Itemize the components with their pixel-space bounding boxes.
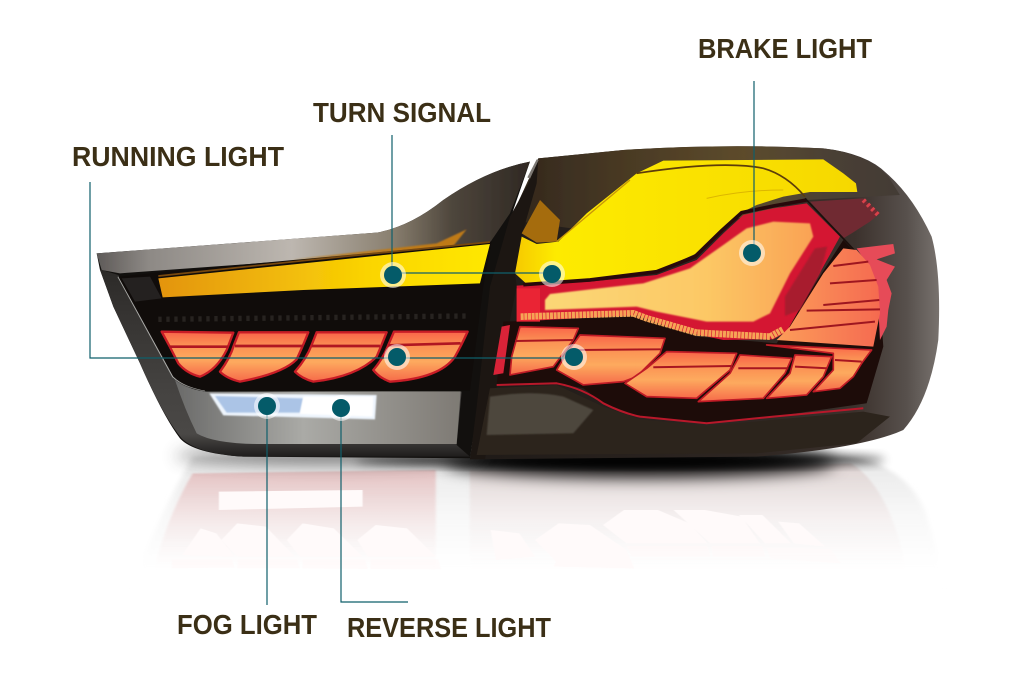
label: brake light: BRAKE LIGHT xyxy=(698,33,872,64)
marker: reverse light xyxy=(328,395,354,421)
left trunk lamp xyxy=(97,162,530,458)
label: running light: RUNNING LIGHT xyxy=(72,141,284,172)
yellow turn signal area xyxy=(515,159,857,284)
running light fins xyxy=(493,244,895,423)
marker: running light, trunk lamp xyxy=(384,344,410,370)
marker: turn signal, trunk lamp xyxy=(380,262,406,288)
outer left edge xyxy=(100,269,470,457)
fin recess xyxy=(497,240,883,423)
amber reflector xyxy=(522,200,560,243)
marker: turn signal, fender lamp xyxy=(539,261,565,287)
marker: running light, fender lamp xyxy=(561,344,587,370)
floor shadow under the lamp xyxy=(175,447,885,477)
label: reverse light: REVERSE LIGHT xyxy=(347,612,551,643)
brake light xyxy=(517,198,880,343)
label: fog light: FOG LIGHT xyxy=(177,609,317,640)
callout lines xyxy=(90,81,754,605)
divider xyxy=(470,158,538,459)
running light panels xyxy=(162,332,468,382)
marker: brake light xyxy=(739,240,765,266)
reverse and fog light strip xyxy=(209,393,377,419)
outer housing xyxy=(97,162,530,458)
turn signal amber strip xyxy=(158,229,490,297)
grey top band xyxy=(97,162,530,273)
lower brown housing xyxy=(477,385,890,455)
upper right red detail xyxy=(810,198,880,238)
grey lower panel xyxy=(175,380,461,444)
tail light assembly xyxy=(97,146,939,459)
outer housing xyxy=(470,146,939,459)
label: turn signal: TURN SIGNAL xyxy=(313,97,491,128)
upper amber housing xyxy=(510,146,900,240)
reflection of the lamp on the floor xyxy=(130,457,945,590)
marker: fog light xyxy=(254,393,280,419)
right fender lamp xyxy=(470,146,939,459)
black inner recess xyxy=(118,242,492,391)
